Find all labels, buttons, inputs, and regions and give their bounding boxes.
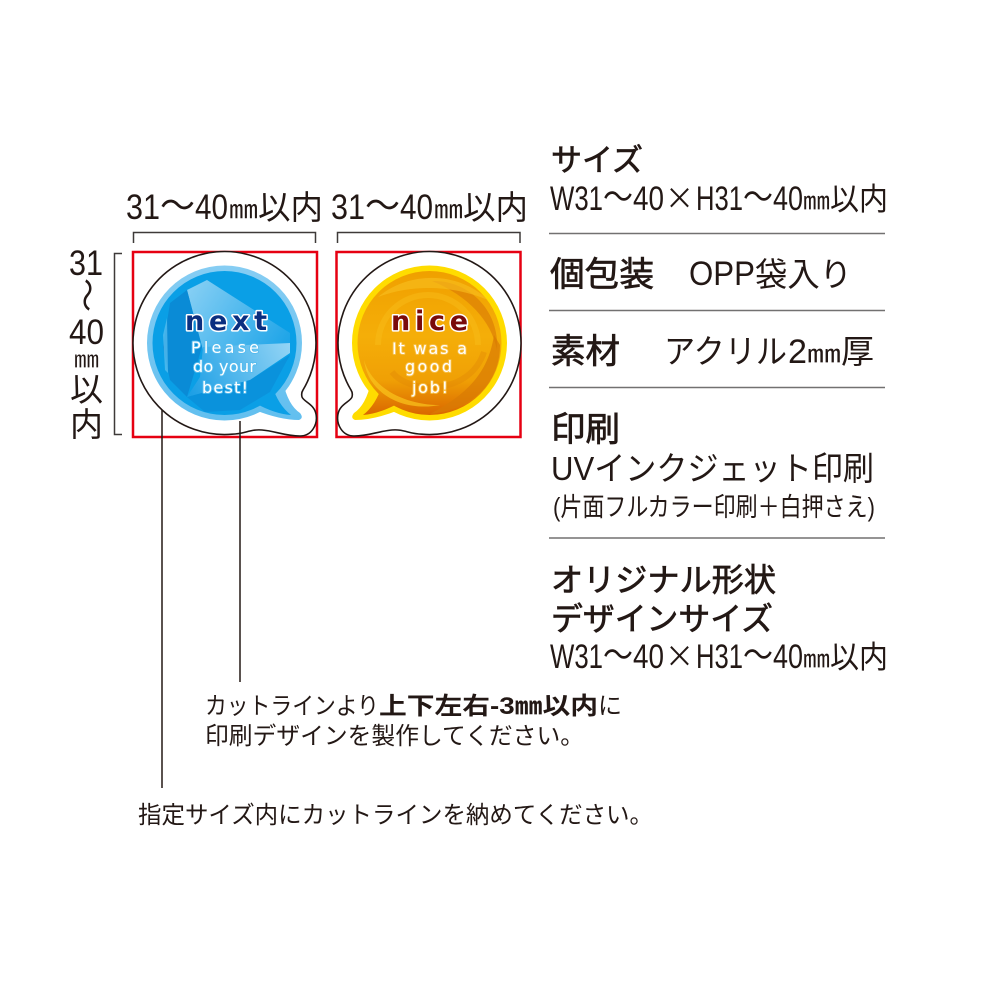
text: size value: 40 [633,180,664,218]
dimension label: vertical height: 以 [70,371,103,408]
text: Please do your best [191,338,259,397]
dimension label: vertical height: 〜 [69,278,102,312]
text: printing method: UVインクジェット印刷 [551,450,874,487]
cut line [133,252,316,436]
width bracket left [134,232,316,243]
text: size value: 〜 [603,179,633,217]
bubble border [147,265,302,421]
dimension label: top width right: 40 [400,188,433,227]
text: It was a good job: good [405,357,452,376]
row: material: アクリル [664,333,787,370]
note: print area: に [598,693,622,720]
leader line: cut line note [161,410,163,788]
red size frame right [336,252,520,437]
row: material: ㎜ [807,341,841,368]
dimension label: vertical height: 40 [69,313,104,352]
dimension label: vertical height: 31 [69,244,103,283]
row: material: 厚 [841,333,874,370]
dimension label: top width left: 以内 [258,189,323,226]
note: print area: 上下左右-3㎜以内 [379,693,598,720]
badge: next [133,252,316,436]
text: Please do your best: do your [193,357,256,376]
dimension label: top width left: ㎜ [229,196,258,224]
text: size value [550,174,888,218]
text: printing note: (片面フルカラー印刷＋白押さえ) [553,492,875,522]
note: print area: カットラインより [205,693,379,720]
text: design size value [550,632,888,676]
red size frame left [133,252,317,437]
dimension label: top width left: 31 [126,188,160,227]
heading: original shape: オリジナル形状 [551,562,776,598]
text: design size value: 以内 [830,640,888,675]
text: design size value: 〜 [743,637,773,675]
badge: nice [338,252,521,436]
dimension label: top width right [331,187,528,227]
bubble border [352,265,507,421]
note: print area [205,693,622,750]
text: size value: 〜 [743,179,773,217]
text: nice: nice [391,306,468,337]
text: size value: 以内 [830,182,888,217]
text: design size value: W31 [550,638,603,676]
leader line: print area note [239,421,241,682]
text: next: next [185,306,267,337]
row: packaging: OPP [689,255,755,293]
dimension label: top width left: 40 [195,188,228,227]
text: size value: 40 [773,180,803,218]
dimension label: vertical height [69,244,104,443]
row: packaging: 個包装 [550,256,654,294]
swirl pattern [364,278,500,414]
dimension label: top width left: 〜 [160,187,195,226]
dimension label: top width left [126,187,323,227]
text: It was a good job: job! [411,378,448,397]
width bracket right [338,232,520,243]
row: packaging [550,255,852,294]
text: size value: H31 [696,180,743,218]
text: It was a good job: It was a [392,339,467,358]
dimension label: top width right: ㎜ [434,196,463,224]
heading: size: サイズ [551,143,643,178]
text: size value: W31 [550,180,603,218]
dimension label: vertical height: 内 [70,406,103,443]
heading: printing: 印刷 [551,411,620,449]
heading: original shape [551,562,776,637]
note: cut line: 指定サイズ内にカットラインを納めてください。 [138,802,653,829]
height bracket [114,254,122,434]
text: design size value: 40 [773,638,803,676]
text: design size value: ㎜ [803,646,830,673]
text: design size value: × [665,632,694,676]
dimension label: top width right: 31 [331,188,365,227]
facet pattern [163,280,290,412]
heading: original shape: デザインサイズ [551,601,773,637]
text: Please do your best: best! [202,378,248,397]
text: design size value: 〜 [603,637,633,675]
text: It was a good job [392,339,467,397]
row: packaging: 袋入り [755,256,852,293]
dimension label: top width right: 〜 [365,187,400,226]
row: material: 素材 [551,333,620,371]
bubble face [358,271,502,415]
dimension label: top width right: 以内 [463,189,528,226]
cut line [338,252,521,436]
row: material [551,333,874,371]
text: Please do your best: Please [191,338,259,357]
bubble face [152,271,296,415]
text: size value: ㎜ [803,188,830,215]
row: material: 2 [788,333,807,371]
text: design size value: H31 [696,638,743,676]
note: print area: 印刷デザインを製作してください。 [205,723,584,750]
dimension label: vertical height: ㎜ [74,346,99,372]
text: design size value: 40 [633,638,664,676]
text: size value: × [665,174,694,218]
